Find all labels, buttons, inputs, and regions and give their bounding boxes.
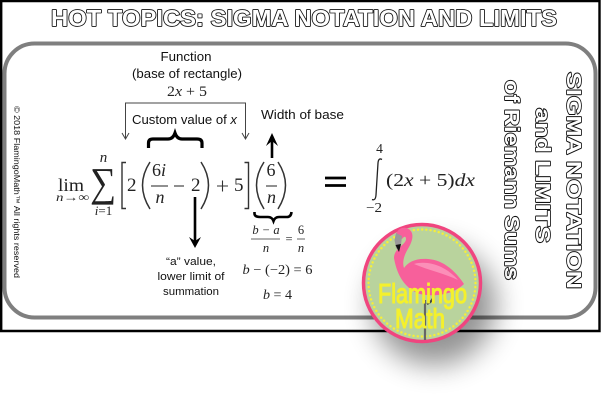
limit of sigma expression: n <box>267 187 276 207</box>
limit of sigma expression: 6i <box>152 160 166 180</box>
limit of sigma expression: 5 <box>234 175 244 196</box>
width working: b = 4 <box>263 287 292 302</box>
label: lower limit <box>158 256 226 298</box>
label: custom value of x: Custom value of x <box>132 112 238 127</box>
bracket arrows: custom value <box>122 103 249 139</box>
label: lower limit: lower limit of <box>158 271 226 283</box>
label: function: (base of rectangle) <box>132 66 242 81</box>
definite integral: −2 <box>366 200 382 215</box>
width working <box>242 223 313 302</box>
badge text: Flamingo <box>378 278 467 309</box>
label: lower limit: “a” value, <box>166 256 216 268</box>
limit of sigma expression: ∑ <box>90 159 116 205</box>
limit of sigma expression: n <box>100 150 107 166</box>
limit of sigma expression: i=1 <box>95 203 112 218</box>
limit of sigma expression <box>56 150 286 218</box>
limit of sigma expression: 2 <box>127 175 136 196</box>
equals sign <box>325 178 346 186</box>
width working: b − (−2) = 6 <box>242 262 313 277</box>
badge: Flamingo Math logo <box>364 224 480 342</box>
badge shadow <box>372 245 496 365</box>
brace: bottom <box>254 212 292 221</box>
label: function: Function <box>160 49 212 64</box>
width working: 6 <box>298 223 304 237</box>
title: HOT TOPICS: SIGMA NOTATION AND LIMITS <box>51 5 557 31</box>
vertical heading: and limits: and LIMITS <box>531 108 553 243</box>
copyright note: © 2018 FlamingoMath™ All rights reserved <box>12 106 21 278</box>
badge: Flamingo Math logo: Math <box>395 303 445 334</box>
label: width of base: Width of base <box>261 107 344 122</box>
rounded panel <box>4 44 596 318</box>
limit of sigma expression: n <box>156 187 164 207</box>
limit of sigma expression: lim <box>58 175 84 195</box>
width working: n <box>298 241 304 255</box>
vertical heading: sigma notation: SIGMA NOTATION <box>562 72 584 289</box>
definite integral <box>366 141 475 215</box>
vertical heading: of Riemann Sums: of Riemann Sums <box>500 80 522 280</box>
definite integral: 4 <box>376 141 383 156</box>
limit of sigma expression: 2 <box>191 175 200 196</box>
brace: top <box>148 133 202 148</box>
flamingo <box>394 228 464 340</box>
label: lower limit: summation <box>163 286 219 298</box>
arrow: width up <box>266 133 278 158</box>
limit of sigma expression: 6 <box>266 160 276 180</box>
arrow: lower limit down <box>189 197 201 248</box>
limit of sigma expression: n→∞ <box>56 190 90 204</box>
label: function <box>132 49 242 100</box>
width working: = <box>285 232 293 246</box>
width working: b − a <box>252 223 280 237</box>
width working: n <box>263 241 269 255</box>
definite integral: (2x + 5) dx <box>386 170 475 191</box>
label: function: 2x + 5 <box>167 84 207 100</box>
